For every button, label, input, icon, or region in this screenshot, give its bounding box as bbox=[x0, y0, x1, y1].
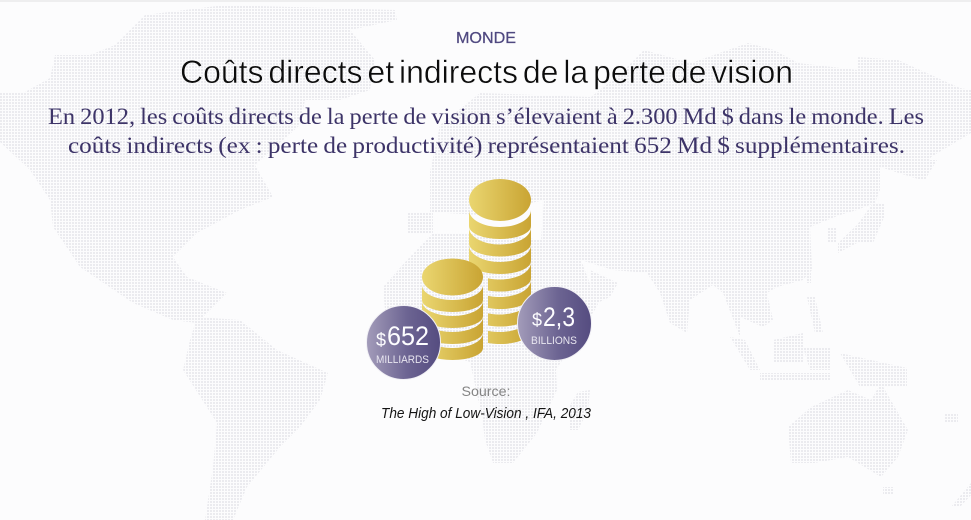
section label: MONDE bbox=[456, 30, 516, 47]
map: South America bbox=[183, 317, 328, 520]
map: Indonesia and New Guinea bbox=[730, 333, 907, 387]
value: $ bbox=[376, 330, 386, 350]
title: Coûts directs et indirects de la perte de vision bbox=[180, 54, 793, 90]
source citation: The High of Low-Vision , IFA, 2013 bbox=[381, 406, 591, 422]
unit: BILLIONS bbox=[531, 335, 577, 347]
map: Kamchatka tip bbox=[917, 160, 937, 180]
map: Africa bbox=[383, 233, 598, 463]
icon: short coin stack bbox=[422, 258, 483, 360]
value bbox=[532, 302, 575, 332]
map: Philippines and Taiwan bbox=[807, 273, 823, 333]
icon: tall coin stack bbox=[469, 179, 531, 344]
intro line 2: coûts indirects (ex : perte de productivité) représentaient 652 Md $ supplémentaires. bbox=[68, 133, 905, 158]
map: Madagascar bbox=[570, 390, 590, 430]
map: Australia bbox=[788, 383, 908, 477]
map: Eurasia bbox=[430, 43, 971, 337]
intro line 1: En 2012, les coûts directs de la perte de vision s’élevaient à 2.300 Md $ dans le monde. Les bbox=[48, 104, 924, 129]
map: Arabia bbox=[590, 270, 618, 305]
map: Japan and Korea bbox=[827, 203, 885, 253]
map: Tasmania, New Zealand and Pacific islands bbox=[883, 413, 971, 507]
source label: Source: bbox=[462, 383, 510, 399]
value: $ bbox=[532, 310, 542, 330]
unit: MILLIARDS bbox=[376, 354, 429, 366]
map: North America and Greenland bbox=[0, 5, 397, 323]
map: Iberia bbox=[407, 213, 433, 233]
intro text bbox=[48, 104, 924, 158]
badge: 652 milliards bbox=[366, 306, 440, 380]
value: 2,3 bbox=[543, 302, 575, 332]
badge: 2,3 billions bbox=[518, 286, 592, 360]
value: 652 bbox=[387, 321, 429, 351]
